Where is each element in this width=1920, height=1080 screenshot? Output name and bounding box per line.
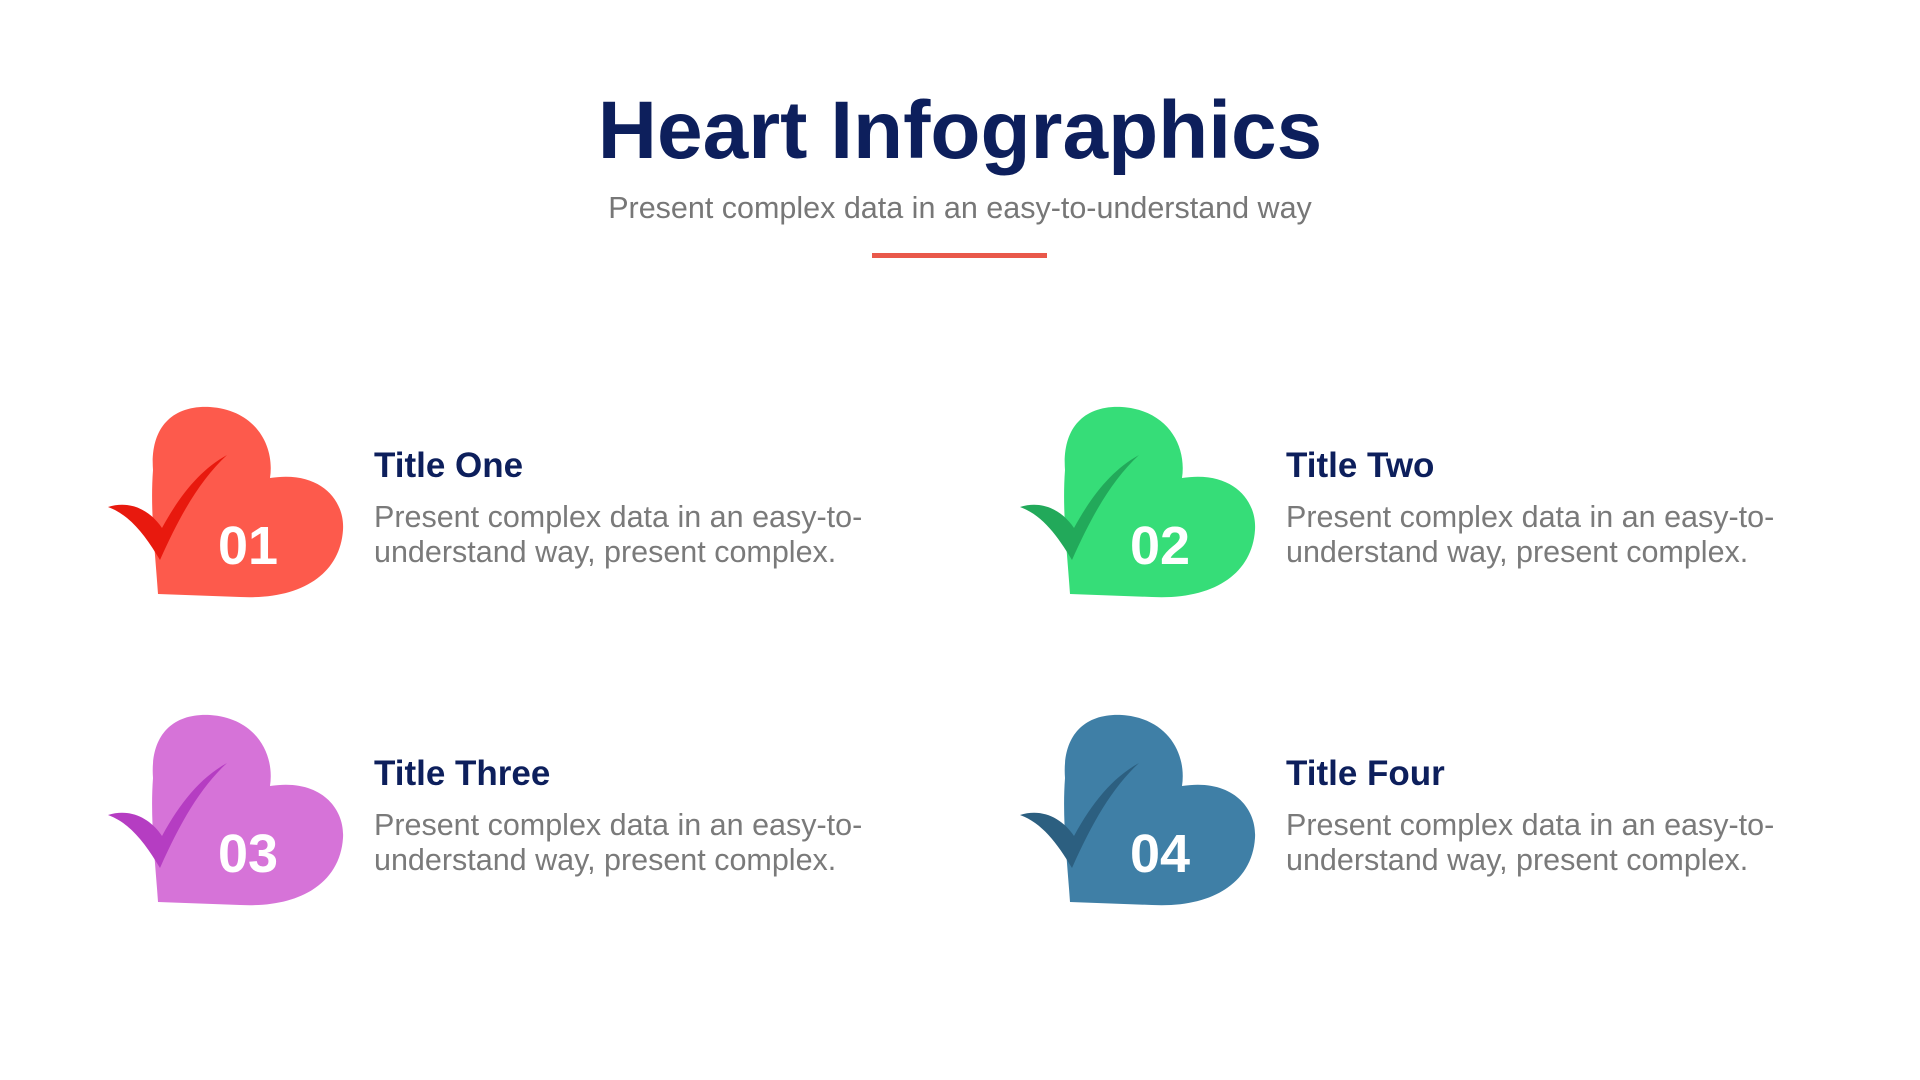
- heading: Title One: Title One: [374, 446, 523, 485]
- accent line: [872, 253, 1047, 258]
- text: body one: [374, 500, 862, 569]
- text: body three: Present complex data in an easy-to-: [374, 808, 862, 842]
- icon: heart 01: [108, 407, 343, 597]
- title: Heart Infographics: [598, 85, 1322, 176]
- text: body three: [374, 808, 862, 877]
- icon: heart 02: 02: [1130, 516, 1190, 576]
- icon: heart 03: 03: [218, 824, 278, 884]
- text: body one: Present complex data in an easy-to-: [374, 500, 862, 534]
- text: body two: [1286, 500, 1774, 569]
- text: body three: understand way, present complex.: [374, 843, 836, 877]
- heading: Title Two: Title Two: [1286, 446, 1434, 485]
- heading: Title Three: Title Three: [374, 754, 550, 793]
- icon: heart 02: [1020, 407, 1255, 597]
- text: body four: understand way, present complex.: [1286, 843, 1748, 877]
- icon: heart 04: 04: [1130, 824, 1190, 884]
- heading: Title Four: Title Four: [1286, 754, 1445, 793]
- icon: heart 04: [1020, 715, 1255, 905]
- text: body four: Present complex data in an easy-to-: [1286, 808, 1774, 842]
- text: body four: [1286, 808, 1774, 877]
- icon: heart 01: 01: [218, 516, 278, 576]
- subtitle: Present complex data in an easy-to-understand way: [608, 191, 1312, 225]
- text: body two: understand way, present complex.: [1286, 535, 1748, 569]
- text: body two: Present complex data in an easy-to-: [1286, 500, 1774, 534]
- text: body one: understand way, present complex.: [374, 535, 836, 569]
- icon: heart 03: [108, 715, 343, 905]
